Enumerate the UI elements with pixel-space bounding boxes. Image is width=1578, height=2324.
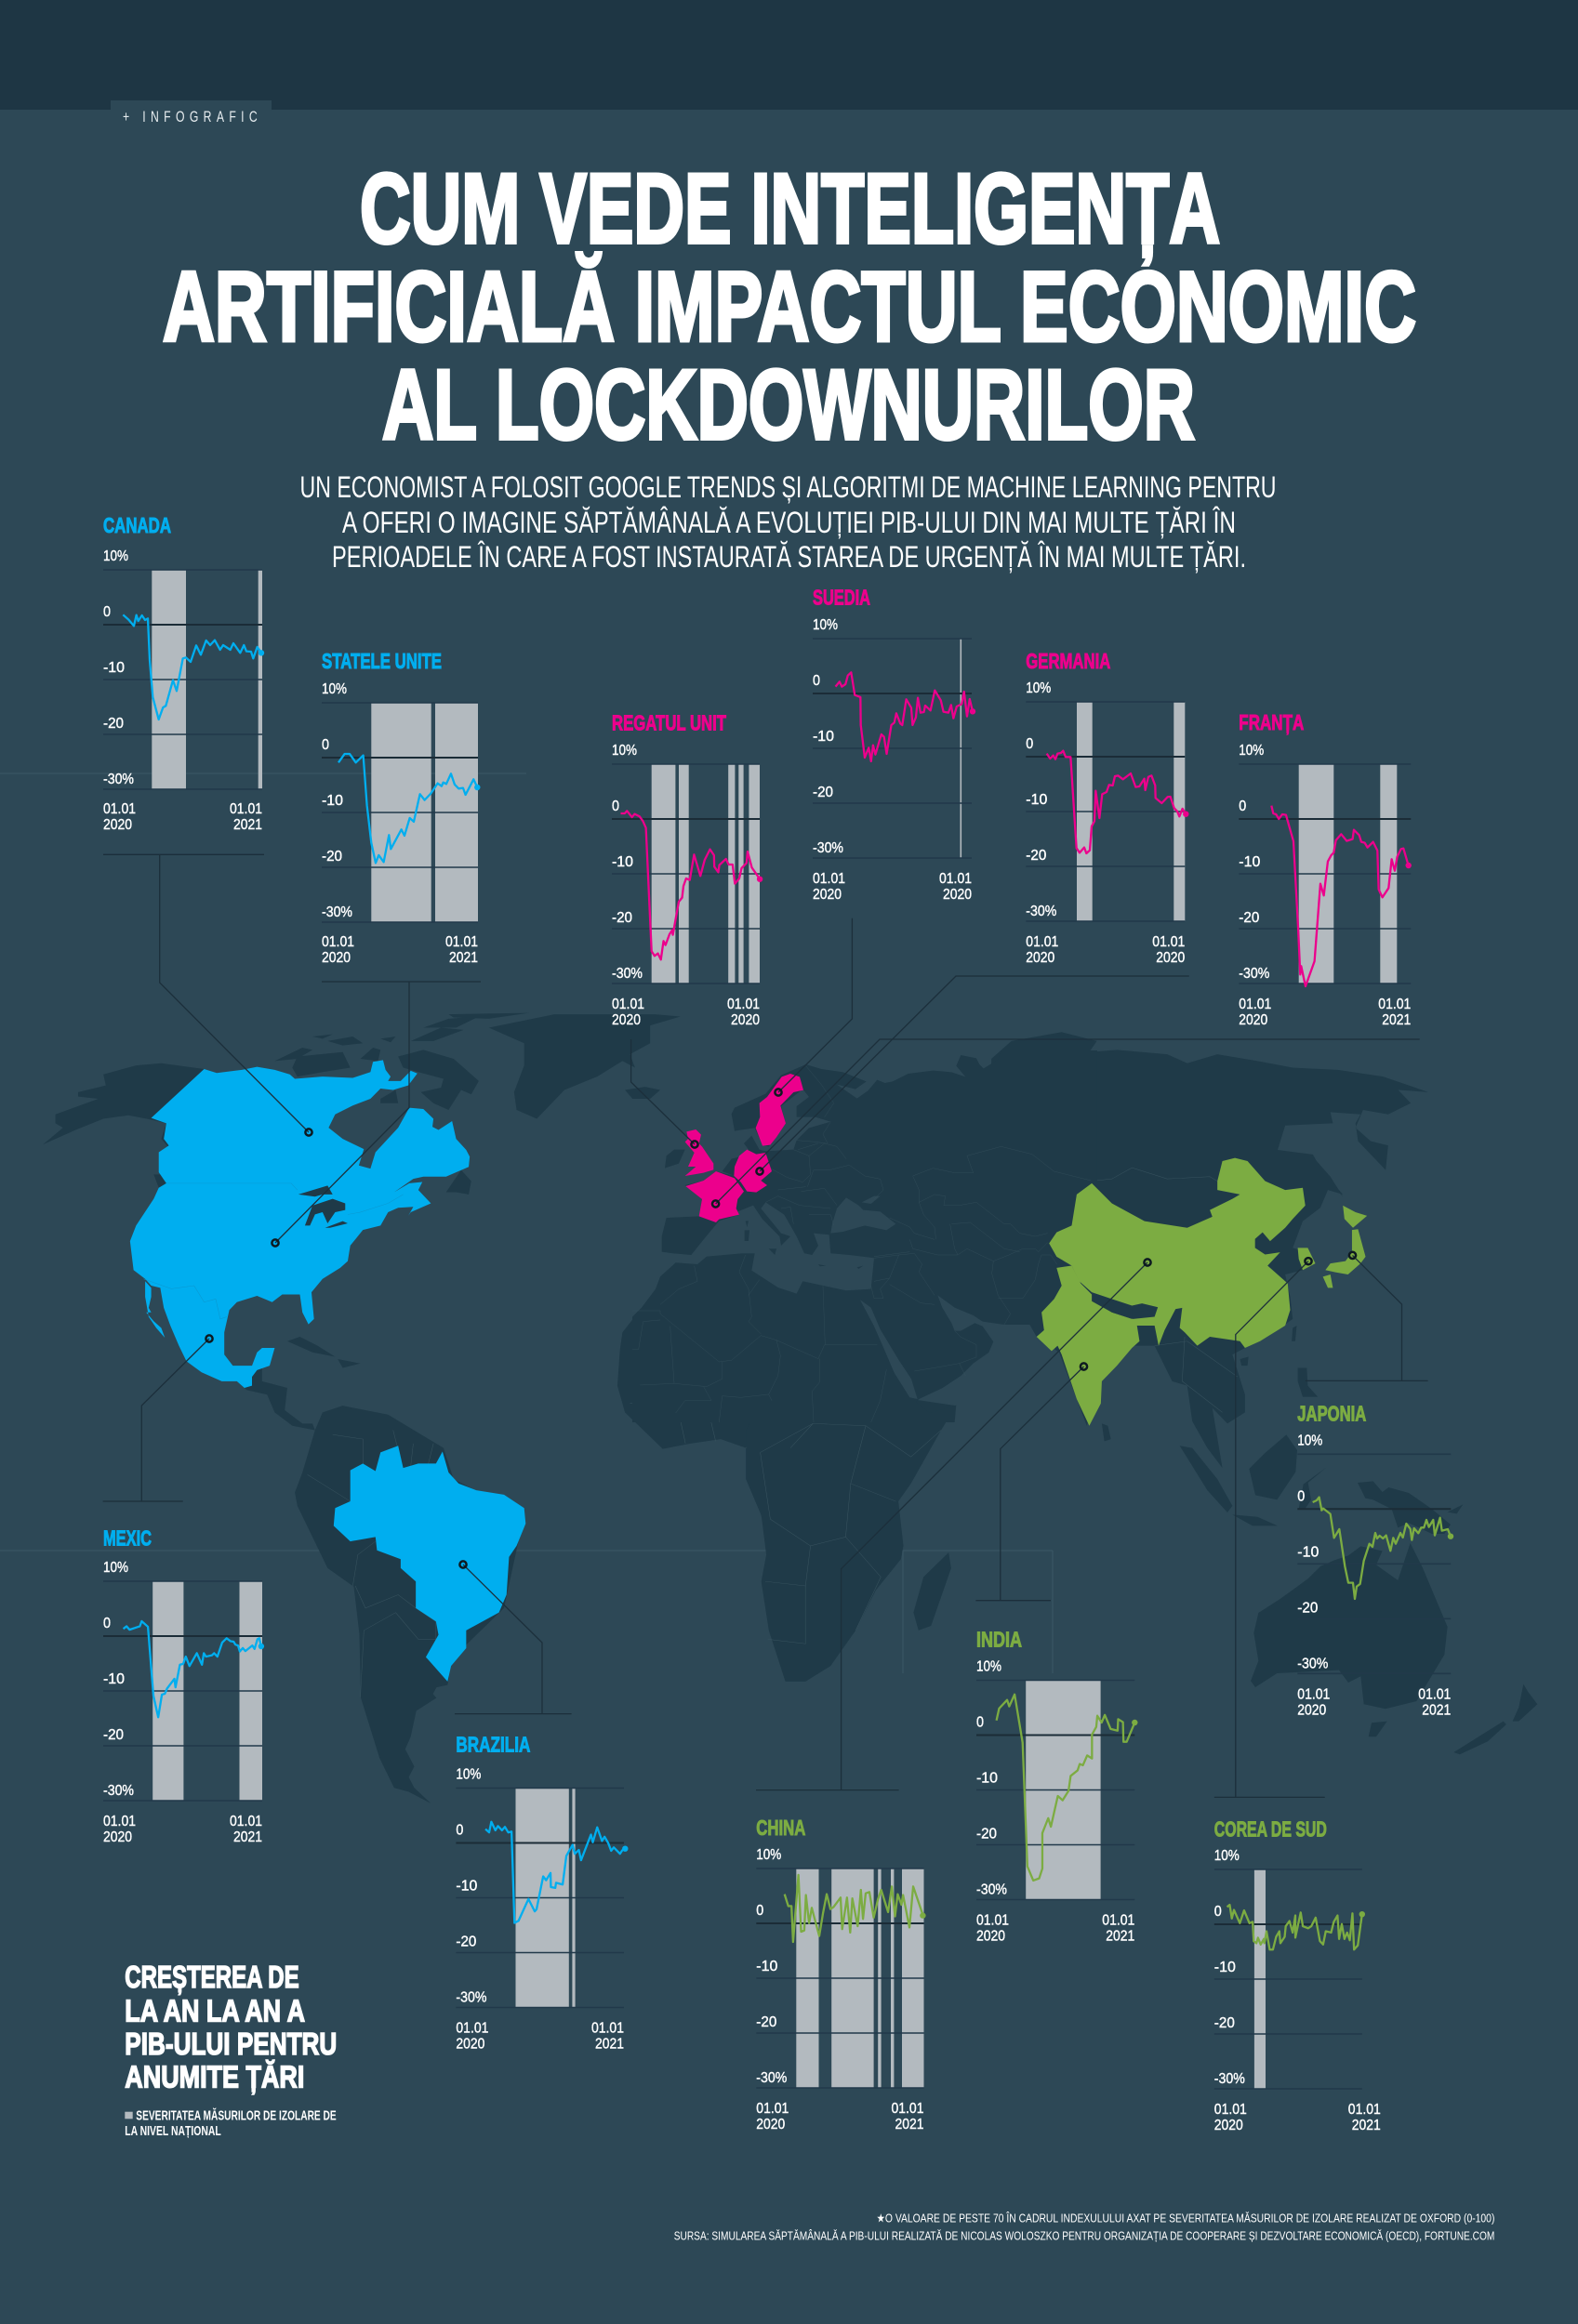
axis: -20 <box>322 849 342 865</box>
axis: 2020 <box>1297 1702 1326 1718</box>
axis: -10 <box>976 1770 998 1787</box>
header band <box>0 0 1578 110</box>
map: Europe, Middle East and North Africa <box>632 1050 1097 1422</box>
axis: 01.01 <box>727 997 760 1012</box>
country markers <box>206 1089 1356 1568</box>
axis: 2020 <box>1214 2118 1243 2133</box>
axis: 10% <box>1026 680 1051 696</box>
axis: 0 <box>322 737 329 753</box>
lockdown bands <box>1077 702 1185 921</box>
chart: Brazil <box>456 1733 629 2053</box>
axis: 2021 <box>895 2117 924 2133</box>
chart title: GERMANIA <box>1026 649 1110 673</box>
axis <box>756 1847 924 2133</box>
GDP line <box>836 672 975 761</box>
chart title: CANADA <box>103 513 171 537</box>
chart title: STATELE UNITE <box>322 649 442 673</box>
axis: 01.01 <box>1297 1686 1330 1702</box>
axis: 01.01 <box>1102 1913 1134 1928</box>
axis: 2020 <box>456 2036 484 2053</box>
axis: 10% <box>322 681 347 697</box>
axis: -30% <box>1026 904 1056 919</box>
axis: 01.01 <box>103 1814 136 1829</box>
axis: 2020 <box>943 887 972 903</box>
Nepal and Bhutan <box>1092 1295 1149 1319</box>
legend text: SEVERITATEA MĂSURILOR DE IZOLARE DE <box>136 2108 337 2124</box>
chart title: BRAZILIA <box>456 1733 530 1757</box>
country: China <box>1049 1158 1306 1348</box>
legend heading: ANUMITE ȚĂRI <box>125 2060 304 2095</box>
axis: 01.01 <box>230 1814 262 1829</box>
Mediterranean islands <box>745 1221 863 1269</box>
axis: 10% <box>103 1560 128 1576</box>
Greenland and Iceland <box>489 1014 681 1119</box>
axis: 2020 <box>612 1012 641 1028</box>
axis: 2020 <box>103 1829 132 1845</box>
axis: 01.01 <box>813 871 845 887</box>
axis: -30% <box>1214 2071 1245 2087</box>
axis <box>612 743 760 1028</box>
axis: 0 <box>1297 1488 1305 1504</box>
country: India <box>1037 1265 1176 1426</box>
lockdown bands <box>371 703 478 922</box>
axis: -20 <box>103 1727 124 1743</box>
axis: -20 <box>456 1934 476 1950</box>
axis: 01.01 <box>1378 997 1411 1012</box>
axis: -10 <box>756 1959 777 1974</box>
axis: 2020 <box>1026 950 1054 966</box>
lockdown bands <box>652 764 760 984</box>
axis: 0 <box>976 1714 984 1731</box>
axis: 10% <box>756 1847 781 1863</box>
axis: -30% <box>612 966 643 982</box>
GDP line <box>1313 1498 1453 1599</box>
axis: -10 <box>322 793 343 809</box>
axis: 2020 <box>103 817 132 833</box>
lockdown bands <box>1254 1869 1266 2090</box>
axis: 2021 <box>1106 1928 1134 1945</box>
axis: 01.01 <box>445 934 478 950</box>
axis: 01.01 <box>976 1913 1009 1928</box>
axis: -20 <box>1297 1600 1318 1616</box>
Asian islands <box>1102 1326 1318 1525</box>
chart title: JAPONIA <box>1297 1401 1366 1425</box>
axis: -10 <box>612 854 633 870</box>
axis: 01.01 <box>1348 2102 1381 2118</box>
axis: 01.01 <box>230 801 262 817</box>
Asia landmass <box>991 1032 1428 1468</box>
legend heading: LA AN LA AN A <box>125 1994 305 2028</box>
axis: 0 <box>612 799 619 814</box>
axis: -30% <box>456 1989 486 2006</box>
axis <box>1214 1848 1381 2133</box>
axis: 10% <box>103 548 128 564</box>
Sakhalin <box>1313 1156 1343 1196</box>
axis: 0 <box>1026 736 1033 752</box>
axis: -30% <box>103 772 134 787</box>
GDP line <box>124 1621 264 1717</box>
chart: France <box>1239 710 1412 1028</box>
legend heading <box>125 1961 337 2095</box>
axis <box>322 681 478 966</box>
country: Germany <box>734 1150 772 1193</box>
chart: Sweden <box>813 586 975 903</box>
Central America and Caribbean <box>245 1337 361 1430</box>
lockdown bands <box>1026 1681 1101 1900</box>
axis: 2021 <box>1382 1012 1411 1028</box>
chart: United Kingdom <box>612 711 762 1028</box>
chart: Japan <box>1297 1401 1453 1718</box>
axis: 2020 <box>976 1928 1005 1945</box>
chart: China <box>756 1816 926 2133</box>
country borders <box>632 1066 1091 1422</box>
chart: Canada <box>103 513 264 833</box>
axis: -20 <box>103 716 124 732</box>
map: Oceania <box>1249 1434 1537 1754</box>
legend heading: PIB-ULUI PENTRU <box>125 2027 337 2062</box>
country: Brazil <box>334 1446 525 1682</box>
axis <box>103 1560 262 1845</box>
axis: 10% <box>976 1658 1001 1675</box>
axis: 0 <box>1214 1904 1222 1920</box>
country: Canada, USA and Mexico <box>130 1060 470 1388</box>
map: Asian highlighted countries <box>1037 1158 1367 1426</box>
axis: -30% <box>322 905 352 920</box>
axis: 01.01 <box>1418 1686 1451 1702</box>
axis: -20 <box>813 785 833 800</box>
axis: -10 <box>1239 854 1260 870</box>
chart: Mexico <box>103 1526 264 1845</box>
axis <box>456 1766 624 2053</box>
landmass <box>632 1050 1097 1422</box>
axis: 10% <box>1239 743 1264 759</box>
intro text <box>299 470 1276 574</box>
lockdown bands <box>960 639 961 858</box>
lockdown bands <box>152 570 262 789</box>
axis <box>813 617 972 903</box>
country: United Kingdom <box>685 1129 713 1176</box>
axis <box>1297 1433 1451 1718</box>
axis: -20 <box>1026 848 1046 864</box>
axis: 01.01 <box>1239 997 1271 1012</box>
axis: -30% <box>1239 966 1269 982</box>
axis: 2020 <box>1239 1012 1267 1028</box>
axis: 0 <box>756 1903 763 1919</box>
axis: 01.01 <box>612 997 644 1012</box>
axis: 2020 <box>731 1012 760 1028</box>
axis: 2021 <box>233 817 262 833</box>
axis: 10% <box>813 617 838 633</box>
chart title: INDIA <box>976 1627 1022 1651</box>
Great Lakes <box>298 1185 348 1228</box>
intro text: A OFERI O IMAGINE SĂPTĂMÂNALĂ A EVOLUȚIEI PIB-ULUI DIN MAI MULTE ȚĂRI ÎN <box>342 506 1236 539</box>
axis: -30% <box>976 1882 1007 1898</box>
axis: -10 <box>813 729 834 745</box>
leader lines <box>103 854 1428 1797</box>
GDP line <box>620 811 762 959</box>
axis <box>1239 743 1411 1028</box>
West Africa <box>617 1292 816 1564</box>
chart: United States <box>322 649 480 966</box>
axis: -20 <box>1239 910 1259 926</box>
axis <box>1026 680 1185 966</box>
axis: 01.01 <box>103 801 136 817</box>
chart title: CHINA <box>756 1816 805 1840</box>
axis: 01.01 <box>456 2021 488 2036</box>
axis: -10 <box>1214 1960 1236 1975</box>
title: AL LOCKDOWNURILOR <box>382 349 1195 460</box>
legend text: LA NIVEL NAȚIONAL <box>125 2124 221 2139</box>
axis: 01.01 <box>322 934 354 950</box>
Africa south and east <box>746 1341 956 1682</box>
chart: Germany <box>1026 649 1189 966</box>
Alaska and Arctic islands <box>43 1013 529 1195</box>
axis: 10% <box>612 743 637 759</box>
axis: 2020 <box>756 2117 785 2133</box>
chart title: COREA DE SUD <box>1214 1817 1327 1842</box>
panel: chart legend <box>125 1961 337 2139</box>
axis: 0 <box>813 673 820 689</box>
footnote and source <box>674 2212 1494 2242</box>
GDP line <box>1047 751 1189 853</box>
axis: 01.01 <box>1026 934 1058 950</box>
intro text: PERIOADELE ÎN CARE A FOST INSTAURATĂ STAREA DE URGENȚĂ ÎN MAI MULTE ȚĂRI. <box>332 540 1246 574</box>
axis: 0 <box>103 1616 111 1631</box>
axis: 2021 <box>595 2036 624 2053</box>
section tag <box>111 100 272 126</box>
axis: 01.01 <box>1214 2102 1247 2118</box>
axis: 0 <box>456 1822 463 1839</box>
GDP line <box>997 1695 1138 1881</box>
GDP line <box>1271 806 1412 986</box>
GDP line <box>1227 1905 1365 1949</box>
axis: 01.01 <box>891 2101 924 2117</box>
axis <box>976 1658 1134 1945</box>
Ireland <box>665 1150 685 1169</box>
axis: 10% <box>1214 1848 1240 1864</box>
country: Sweden <box>756 1074 803 1146</box>
axis: 2021 <box>449 950 478 966</box>
South America <box>295 1406 524 1803</box>
title: CUM VEDE INTELIGENȚA <box>360 152 1220 265</box>
axis: 10% <box>1297 1433 1322 1448</box>
axis: 2021 <box>1422 1702 1451 1718</box>
axis <box>103 548 262 833</box>
axis: 2021 <box>1352 2118 1381 2133</box>
chart title: FRANȚA <box>1239 710 1304 734</box>
lockdown bands <box>515 1789 576 2008</box>
map: Americas, Greenland and West Africa <box>43 1013 816 1803</box>
axis: -30% <box>1297 1656 1328 1671</box>
axis: 2020 <box>813 887 842 903</box>
lockdown bands <box>1299 764 1397 984</box>
legend text <box>125 2108 337 2139</box>
world map <box>43 1013 1537 1803</box>
chart title: MEXIC <box>103 1526 152 1551</box>
country: France <box>685 1171 744 1222</box>
axis: 01.01 <box>756 2101 789 2117</box>
GDP line <box>123 614 264 720</box>
axis: -20 <box>756 2014 776 2030</box>
axis: 2021 <box>233 1829 262 1845</box>
axis: -30% <box>813 840 843 856</box>
GDP line <box>338 754 480 863</box>
chart title: SUEDIA <box>813 586 870 610</box>
axis: 2020 <box>322 950 351 966</box>
title <box>163 152 1416 460</box>
axis: 01.01 <box>1152 934 1185 950</box>
axis: 01.01 <box>591 2021 624 2036</box>
axis: -10 <box>1026 792 1047 808</box>
axis: -10 <box>103 660 125 676</box>
section tag: + INFOGRAFIC <box>123 109 258 126</box>
axis: -20 <box>1214 2015 1235 2031</box>
legend swatch <box>125 2112 133 2119</box>
chart: India <box>976 1627 1138 1945</box>
axis: 01.01 <box>939 871 972 887</box>
country: South Korea <box>1298 1248 1316 1270</box>
axis: -30% <box>103 1783 134 1799</box>
lockdown bands <box>152 1581 262 1801</box>
axis: -20 <box>976 1826 997 1842</box>
axis: 10% <box>456 1766 481 1783</box>
country: Japan <box>1323 1206 1367 1287</box>
axis: 0 <box>1239 799 1246 814</box>
axis: 2020 <box>1156 950 1185 966</box>
map: Siberia, East Asia and East Africa <box>746 1032 1428 1682</box>
inland seas <box>830 1196 918 1399</box>
GDP line <box>785 1875 926 1942</box>
axis: -20 <box>612 910 632 926</box>
Madagascar <box>913 1552 951 1631</box>
chart title: REGATUL UNIT <box>612 711 726 735</box>
lockdown bands <box>796 1868 924 2088</box>
axis: -30% <box>756 2070 787 2086</box>
axis: 0 <box>103 604 111 620</box>
chart: South Korea <box>1214 1817 1381 2133</box>
legend heading: CREȘTEREA DE <box>125 1961 299 1995</box>
axis: -10 <box>456 1878 478 1895</box>
GDP line <box>485 1822 629 1923</box>
axis: -10 <box>103 1671 125 1687</box>
axis: -10 <box>1297 1544 1319 1560</box>
